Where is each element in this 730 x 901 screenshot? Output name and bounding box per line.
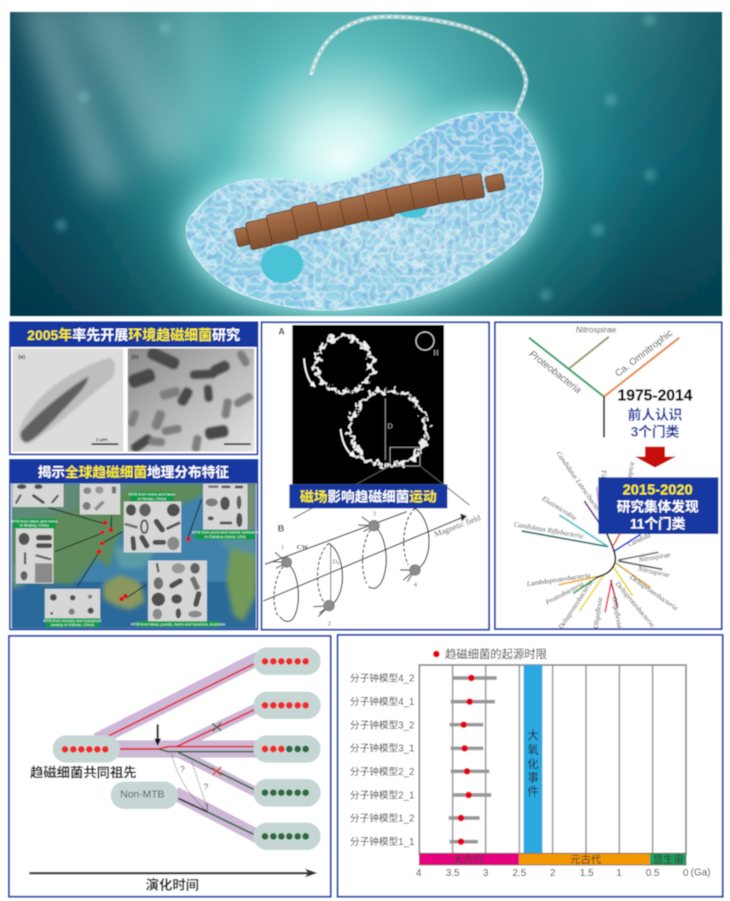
green location labels: MTB from lakes and rivers xyxy=(11,518,58,523)
geologic eon bar: 元古代 xyxy=(570,853,602,866)
arrows from sites xyxy=(48,499,202,598)
swimming track micrograph: D xyxy=(387,421,393,430)
ancestor pill xyxy=(53,735,120,763)
diagram labels: Magnetic field xyxy=(433,513,483,539)
row labels: 分子钟模型4_1 xyxy=(350,696,414,708)
expanded phylogenetic tree: Nitrospirae xyxy=(637,551,671,564)
early phylogenetic tree xyxy=(527,324,679,437)
2015-2020 callout: 2015-2020 xyxy=(623,482,693,498)
x axis ticks: 2.5 xyxy=(512,868,527,879)
early phylogenetic tree: Ca. Omnitrophic xyxy=(613,328,675,380)
geologic eon bar: 显生宙 xyxy=(653,853,684,866)
diagram labels xyxy=(281,511,483,628)
expanded phylogenetic tree: Proteobacteria xyxy=(543,580,586,607)
x axis ticks: 0.5 xyxy=(646,868,660,879)
row labels: 分子钟模型1_1 xyxy=(350,836,414,848)
micrograph insets xyxy=(13,484,247,622)
panel: global distribution map xyxy=(10,460,259,629)
confidence interval bars xyxy=(449,678,497,842)
green location labels: MTB from pond and marine sediment xyxy=(192,530,259,535)
magnetosome chain xyxy=(234,173,505,250)
2015-2020 callout: 11个门类 xyxy=(630,515,686,531)
green location labels: in Beijing, China xyxy=(20,523,50,528)
x axis ticks: 1.5 xyxy=(580,868,594,879)
diagram labels: 3 xyxy=(373,511,377,518)
hero illustration: magnetotactic bacterium xyxy=(10,0,722,316)
cell body xyxy=(186,112,543,310)
label B: B xyxy=(278,524,285,534)
flagellum xyxy=(311,17,526,115)
expanded phylogenetic tree: Deltaproteobacteria xyxy=(627,573,680,613)
2015-2020 callout: 研究集体发现 xyxy=(617,499,699,515)
micrograph a: (a) xyxy=(18,354,25,360)
horizontal transfer dashed arrows: ? xyxy=(180,765,185,775)
expanded phylogenetic tree: Candidatus Latescibacteria xyxy=(554,450,606,518)
world map xyxy=(12,483,256,628)
green location labels: MTB from estuary and mangrove xyxy=(43,618,102,623)
x axis ticks: 0 xyxy=(683,868,689,879)
micrograph a: 1 μm xyxy=(96,437,108,443)
swimming track micrograph xyxy=(292,325,444,484)
x axis ticks xyxy=(416,868,711,879)
expanded phylogenetic tree: Oligoflexia xyxy=(592,596,604,629)
great oxidation event band: 事 xyxy=(527,772,539,785)
x axis ticks: 2 xyxy=(550,868,556,879)
expanded phylogenetic tree: opica xyxy=(625,461,636,478)
green location labels: in Catalina Island, USA xyxy=(205,534,246,539)
panel: molecular clock chart xyxy=(338,635,723,897)
geologic eon bar xyxy=(419,853,686,866)
horizontal transfer dashed arrows: ? xyxy=(203,782,208,792)
expanded phylogenetic tree: Oligoflexia xyxy=(610,596,624,629)
diagram labels: D₀ xyxy=(332,559,340,566)
previous knowledge text: 前人认识 xyxy=(628,406,683,422)
panel: evolutionary scenario xyxy=(9,636,331,897)
great oxidation event band: 化 xyxy=(527,757,539,771)
diagram labels: 1 xyxy=(281,545,284,551)
heading: 2005年率先开展环境趋磁细菌研究 xyxy=(27,327,240,343)
ancestor arrow xyxy=(154,724,161,746)
panel: phylogeny expansion xyxy=(495,322,722,632)
origin age points xyxy=(458,675,475,845)
legend: 趋磁细菌的起源时限 xyxy=(445,647,547,661)
label A: A xyxy=(278,326,285,336)
green location labels xyxy=(11,492,259,627)
green location labels: MTB from rivers and lakes xyxy=(129,492,175,497)
micrograph b xyxy=(127,346,254,454)
time axis label: 演化时间 xyxy=(146,876,199,892)
panel: magnetic field affects motility xyxy=(262,322,489,630)
header bar xyxy=(10,322,257,347)
cell markers with flagella xyxy=(272,517,420,617)
lineage bands xyxy=(97,658,258,837)
expanded phylogenetic tree: Lambdaproteobacteria xyxy=(525,571,592,588)
micrograph b: (b) xyxy=(131,354,139,360)
row labels: 分子钟模型3_1 xyxy=(350,743,414,755)
sampling site markers xyxy=(97,520,191,601)
green location labels: swamp in Hainan, China xyxy=(51,622,95,627)
x axis ticks: (Ga) xyxy=(691,868,711,879)
previous knowledge text xyxy=(628,406,683,439)
nucleoid blobs xyxy=(261,202,427,283)
time arrow xyxy=(29,869,317,877)
expanded phylogenetic tree: Candida xyxy=(627,531,652,549)
expanded phylogenetic tree: Nitrospirae xyxy=(636,565,670,579)
previous knowledge text: 3个门类 xyxy=(631,423,680,439)
x axis ticks: 3 xyxy=(483,868,489,879)
row labels xyxy=(350,672,414,848)
great oxidation event band: 件 xyxy=(527,785,539,799)
heading: 揭示全球趋磁细菌地理分布特征 xyxy=(38,464,229,480)
zoom guide lines xyxy=(293,466,469,518)
diagram labels: 2 xyxy=(328,621,331,628)
red down arrow xyxy=(635,447,676,468)
geologic eon bar: 太古代 xyxy=(453,853,484,866)
horizontal transfer dashed arrows xyxy=(172,753,208,811)
diagram labels: CW xyxy=(297,544,308,551)
expanded phylogenetic tree xyxy=(513,450,680,632)
x axis ticks: 1 xyxy=(616,868,622,879)
expanded phylogenetic tree: Fib xyxy=(600,469,608,480)
great oxidation event band: 氧 xyxy=(527,742,539,756)
descendant pills xyxy=(253,647,321,850)
swimming track micrograph: H xyxy=(433,348,439,357)
2015-2020 callout xyxy=(598,477,718,534)
ancestor label: 趋磁细菌共同祖先 xyxy=(30,764,137,780)
expanded phylogenetic tree: Deltaproteobacteria xyxy=(613,579,656,629)
row labels: 分子钟模型3_2 xyxy=(350,719,414,731)
expanded phylogenetic tree: Elusimicrobia xyxy=(540,494,579,522)
Non-MTB pill xyxy=(111,782,178,809)
green location labels: in Hunan, China xyxy=(138,496,167,501)
diagram labels: 4 xyxy=(414,582,418,589)
Non-MTB pill: Non-MTB xyxy=(120,790,165,801)
plot frame and grid xyxy=(419,665,686,854)
row labels: 分子钟模型2_1 xyxy=(350,789,414,801)
early phylogenetic tree: Proteobacteria xyxy=(527,349,583,396)
row labels: 分子钟模型4_2 xyxy=(350,672,414,684)
great oxidation event band xyxy=(524,665,542,853)
panel: 2005 environmental MTB research xyxy=(10,322,257,454)
years 1975-2014: 1975-2014 xyxy=(618,388,693,405)
label: magnetic field affects movement: 磁场影响趋磁细菌运动 xyxy=(300,489,437,505)
early phylogenetic tree: Nitrospirae xyxy=(576,324,616,334)
gene lineage lines xyxy=(108,663,255,835)
expanded phylogenetic tree: Candidatus Riflebacteria xyxy=(513,520,585,541)
great oxidation event band: 大 xyxy=(527,728,539,742)
helical trajectory diagram xyxy=(263,508,466,621)
x axis ticks: 4 xyxy=(416,868,422,879)
row labels: 分子钟模型2_2 xyxy=(350,766,414,778)
x axis ticks: 3.5 xyxy=(446,868,460,879)
expanded phylogenetic tree: Deltaproteobacteria xyxy=(556,579,595,632)
row labels: 分子钟模型1_2 xyxy=(350,813,414,825)
header bar xyxy=(10,460,257,483)
gene loss and gain marks xyxy=(212,723,221,775)
label: magnetic field affects movement xyxy=(289,484,447,508)
micrograph a xyxy=(13,348,123,452)
green location labels: MTB from lakes, ponds, rivers and beaches, Australia xyxy=(131,622,226,627)
